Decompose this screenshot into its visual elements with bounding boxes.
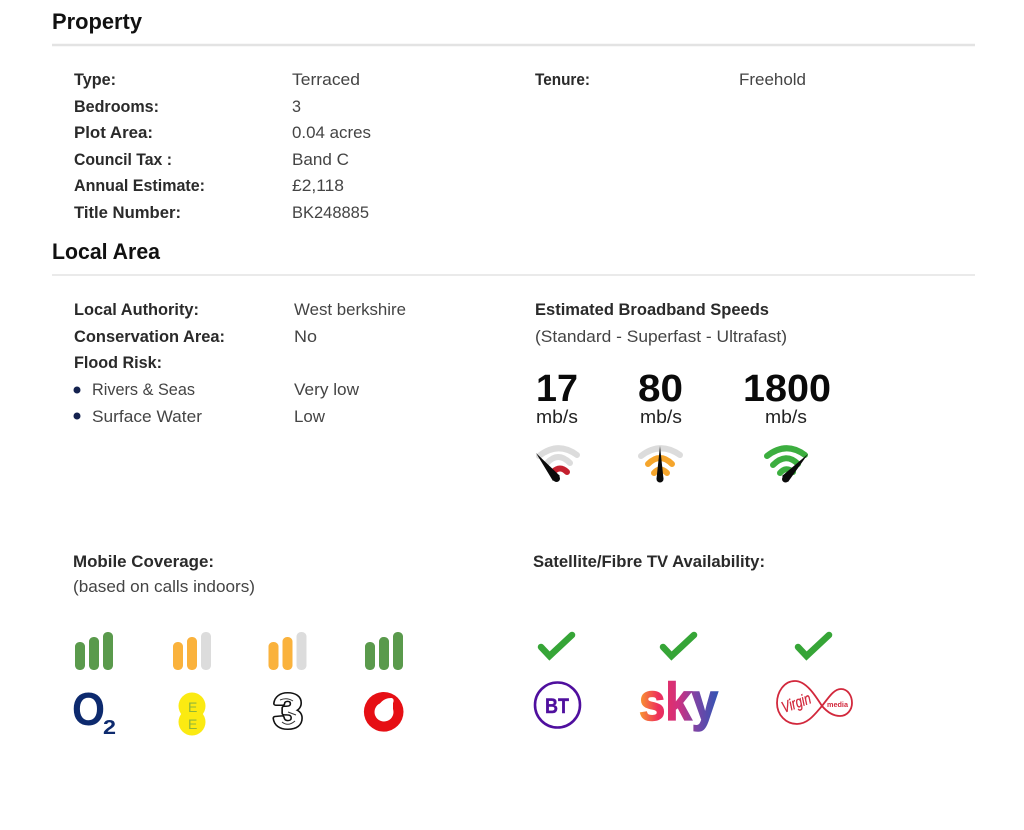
property values: Band C xyxy=(292,150,349,169)
logo: EE xyxy=(178,692,206,736)
logo: BT: BT xyxy=(545,695,569,718)
local area labels: Conservation Area: xyxy=(74,328,225,346)
logo: Sky: sky xyxy=(639,673,718,732)
property values: 0.04 acres xyxy=(292,123,371,142)
property labels xyxy=(74,71,205,222)
property values: Terraced xyxy=(292,70,360,89)
property labels: Title Number: xyxy=(74,204,181,222)
logo: Virgin Media xyxy=(777,681,852,724)
local area labels: Rivers & Seas xyxy=(92,380,195,399)
logo: Vodafone xyxy=(364,692,404,732)
logo: BT xyxy=(535,682,580,728)
heading: property: Property xyxy=(52,9,143,34)
logo: Virgin Media: Virgin xyxy=(780,690,814,717)
signal bars: Three xyxy=(268,632,306,670)
logo: Virgin Media: media xyxy=(827,700,849,709)
local area labels: Local Authority: xyxy=(74,301,199,319)
satellite and fibre TV heading: Satellite/Fibre TV Availability: xyxy=(533,553,765,571)
panel: mobile coverage xyxy=(72,553,404,739)
signal bars: Vodafone xyxy=(365,632,403,670)
mobile coverage subheading: (based on calls indoors) xyxy=(73,577,255,596)
property values: BK248885 xyxy=(292,203,369,222)
icon: Sky available check xyxy=(663,635,694,656)
panel: local area xyxy=(52,239,975,426)
local area values: Low xyxy=(294,407,326,426)
local area labels: Surface Water xyxy=(92,407,202,426)
property values: 3 xyxy=(292,97,301,116)
signal bars: O2 xyxy=(75,632,113,670)
ultrafast speed: 1800 xyxy=(743,368,831,410)
standard speed: mb/s xyxy=(536,407,578,427)
broadband heading: Estimated Broadband Speeds xyxy=(535,301,769,319)
icon: superfast speed gauge xyxy=(641,446,680,482)
property labels: Annual Estimate: xyxy=(74,177,205,195)
tenure row xyxy=(535,70,806,89)
property labels: Bedrooms: xyxy=(74,98,159,116)
property labels: Council Tax : xyxy=(74,151,172,169)
tenure row: Tenure: xyxy=(535,71,590,89)
local area values xyxy=(294,300,406,426)
property values xyxy=(292,70,371,222)
ultrafast speed xyxy=(743,368,831,427)
heading: local area: Local Area xyxy=(52,239,161,264)
superfast speed xyxy=(638,368,683,427)
panel: satellite and fibre TV xyxy=(533,553,852,732)
property labels: Plot Area: xyxy=(74,124,153,142)
icon: standard speed gauge xyxy=(536,448,577,482)
local area labels xyxy=(74,301,225,426)
logo: Three: 3 xyxy=(274,685,302,737)
icon: BT available check xyxy=(541,635,572,656)
local area values: Very low xyxy=(294,380,360,399)
property labels: Type: xyxy=(74,71,116,89)
panel: broadband speeds xyxy=(535,301,831,482)
local area values: No xyxy=(294,327,317,346)
superfast speed: mb/s xyxy=(640,407,682,427)
logo: EE: E xyxy=(188,716,197,732)
logo: O2: 2 xyxy=(103,717,116,739)
ultrafast speed: mb/s xyxy=(765,407,807,427)
local area values: West berkshire xyxy=(294,300,406,319)
broadband subheading: (Standard - Superfast - Ultrafast) xyxy=(535,327,787,346)
icon: ultrafast speed gauge xyxy=(767,448,808,482)
panel: property xyxy=(52,9,975,222)
standard speed: 17 xyxy=(536,368,578,410)
icon: Virgin Media available check xyxy=(798,635,829,656)
signal bars: EE xyxy=(173,632,211,670)
logo: Three: 3 xyxy=(274,685,302,737)
superfast speed: 80 xyxy=(638,368,683,410)
mobile coverage heading: Mobile Coverage: xyxy=(73,553,214,571)
logo: O2: O xyxy=(72,683,105,735)
logo: EE: E xyxy=(188,699,197,715)
local area labels: Flood Risk: xyxy=(74,354,162,372)
tenure row: Freehold xyxy=(739,70,806,89)
property values: £2,118 xyxy=(292,176,344,195)
